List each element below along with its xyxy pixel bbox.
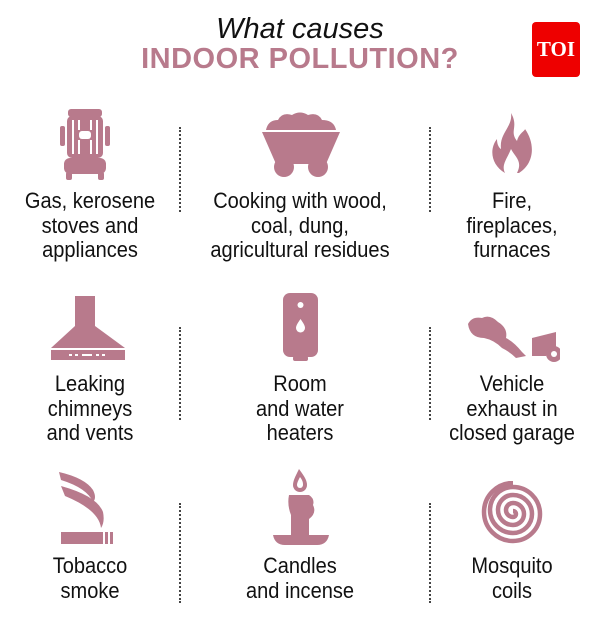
text: col1 row1: stoves and [42, 212, 138, 238]
text: col1 row1: Gas, kerosene [25, 188, 155, 213]
text: col1 row3: smoke [61, 578, 119, 602]
title: What causes [216, 13, 384, 45]
text: col3 row2 [449, 371, 575, 445]
text: col1 row1 [25, 188, 155, 262]
text: col3 row2: closed garage [449, 420, 575, 445]
text: col2 row2: Room [273, 371, 327, 396]
text: col2 row2: and water [256, 396, 344, 420]
text: col1 row1: appliances [42, 237, 138, 262]
text: col2 row1: agricultural residues [210, 237, 390, 262]
text: col3 row2: Vehicle [480, 371, 544, 396]
text: col3 row1 [466, 188, 558, 262]
text: col2 row2: heaters [267, 420, 333, 445]
icon: kerosene heater [60, 109, 110, 180]
logo: TOI: TOI [537, 37, 575, 61]
text: col2 row1: coal, dung, [251, 212, 349, 238]
icon: coal cart [262, 112, 340, 177]
icon: water heater [283, 293, 318, 361]
text: col3 row3 [471, 553, 553, 602]
text: col3 row1: fireplaces, [466, 212, 558, 238]
text: col3 row3: coils [492, 578, 532, 602]
icon: cigarette smoke [59, 472, 113, 544]
icon: candle [273, 469, 329, 545]
text: col3 row1: Fire, [492, 188, 532, 213]
text: col2 row3 [246, 553, 354, 602]
text: col2 row2 [256, 371, 344, 445]
text: col1 row2: Leaking [55, 371, 125, 396]
text: col1 row2: and vents [47, 420, 133, 445]
text: col3 row3: Mosquito [471, 553, 553, 578]
text: col2 row3: Candles [263, 553, 337, 578]
text: col3 row2: exhaust in [466, 396, 558, 420]
text: col1 row3 [53, 553, 127, 602]
icon: flame [492, 113, 532, 173]
text: col1 row3: Tobacco [53, 553, 127, 578]
icon: vehicle exhaust [468, 316, 560, 362]
logo: TOI [532, 22, 580, 77]
title [141, 13, 459, 75]
text: col3 row1: furnaces [474, 237, 550, 262]
icon: mosquito coil [482, 481, 542, 544]
title: INDOOR POLLUTION? [141, 43, 459, 75]
icon: chimney hood [51, 296, 125, 360]
text: col2 row1: Cooking with wood, [213, 188, 387, 213]
text: col2 row3: and incense [246, 578, 354, 602]
text: col2 row1 [210, 188, 390, 262]
text: col1 row2 [47, 371, 133, 445]
text: col1 row2: chimneys [48, 396, 132, 420]
